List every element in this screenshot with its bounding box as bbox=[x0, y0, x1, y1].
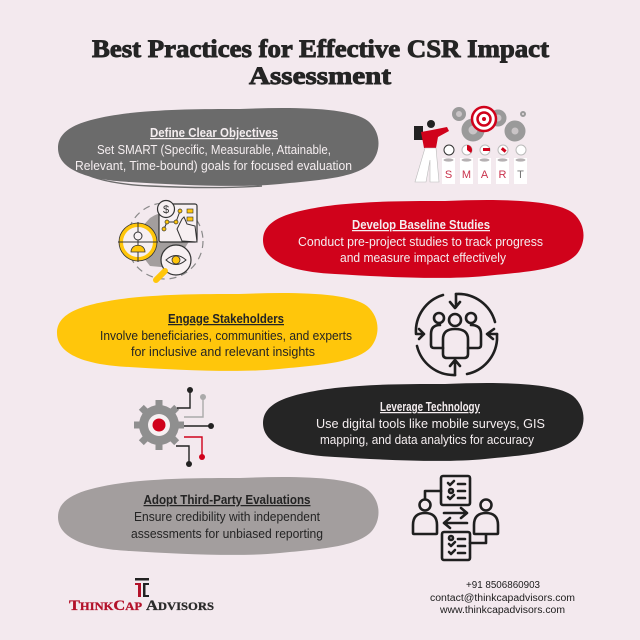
icon: data monitoring: $ bbox=[163, 204, 169, 216]
logo: ADVISORS bbox=[146, 598, 214, 614]
title: Assessment bbox=[249, 63, 392, 90]
contact details: www.thinkcapadvisors.com bbox=[439, 605, 565, 616]
icon: data monitoring bbox=[118, 200, 203, 280]
panel: engage stakeholders: for inclusive and relevant insights bbox=[131, 345, 315, 359]
panel: adopt third-party evaluations: Ensure credibility with independent bbox=[134, 510, 321, 524]
panel: leverage technology: Leverage Technology bbox=[380, 400, 480, 414]
panel: engage stakeholders bbox=[57, 293, 378, 371]
icon: SMART goals: R bbox=[499, 169, 507, 181]
panel: engage stakeholders: Involve beneficiaries, communities, and experts bbox=[100, 329, 352, 343]
panel: engage stakeholders: Engage Stakeholders bbox=[168, 312, 284, 326]
panel: develop baseline studies: Develop Baseline Studies bbox=[352, 218, 490, 232]
panel: adopt third-party evaluations: assessments for unbiased reporting bbox=[131, 527, 323, 541]
logo bbox=[69, 578, 214, 614]
icon: SMART goals: T bbox=[517, 169, 524, 181]
icon: SMART goals bbox=[414, 106, 527, 184]
panel: develop baseline studies: Conduct pre-project studies to track progress bbox=[298, 235, 543, 249]
icon: SMART goals: A bbox=[481, 169, 489, 181]
title: Best Practices for Effective CSR Impact bbox=[92, 36, 550, 63]
panel: develop baseline studies bbox=[263, 200, 584, 278]
contact details: contact@thinkcapadvisors.com bbox=[430, 593, 575, 604]
logo: THINKCAP bbox=[69, 598, 142, 614]
panel: adopt third-party evaluations: Adopt Third-Party Evaluations bbox=[144, 493, 311, 507]
icon: stakeholders cycle bbox=[416, 294, 497, 375]
panel: leverage technology bbox=[263, 383, 584, 461]
panel: develop baseline studies: and measure impact effectively bbox=[340, 251, 507, 265]
title bbox=[92, 36, 550, 90]
contact details bbox=[430, 580, 575, 616]
panel: define clear objectives bbox=[58, 108, 379, 188]
icon: SMART goals: S bbox=[445, 169, 452, 181]
panel: define clear objectives: Define Clear Objectives bbox=[150, 126, 278, 140]
icon: third-party evaluation bbox=[413, 476, 498, 560]
panel: leverage technology: Use digital tools like mobile surveys, GIS bbox=[316, 417, 545, 431]
icon: technology gear bbox=[134, 387, 214, 467]
contact details: +91 8506860903 bbox=[466, 580, 540, 591]
icon: SMART goals: M bbox=[462, 169, 471, 181]
panel: leverage technology: mapping, and data analytics for accuracy bbox=[320, 433, 535, 447]
panel: define clear objectives: Set SMART (Specific, Measurable, Attainable, bbox=[97, 143, 331, 157]
panel: adopt third-party evaluations bbox=[58, 477, 379, 555]
panel: define clear objectives: Relevant, Time-bound) goals for focused evaluation bbox=[75, 159, 352, 173]
